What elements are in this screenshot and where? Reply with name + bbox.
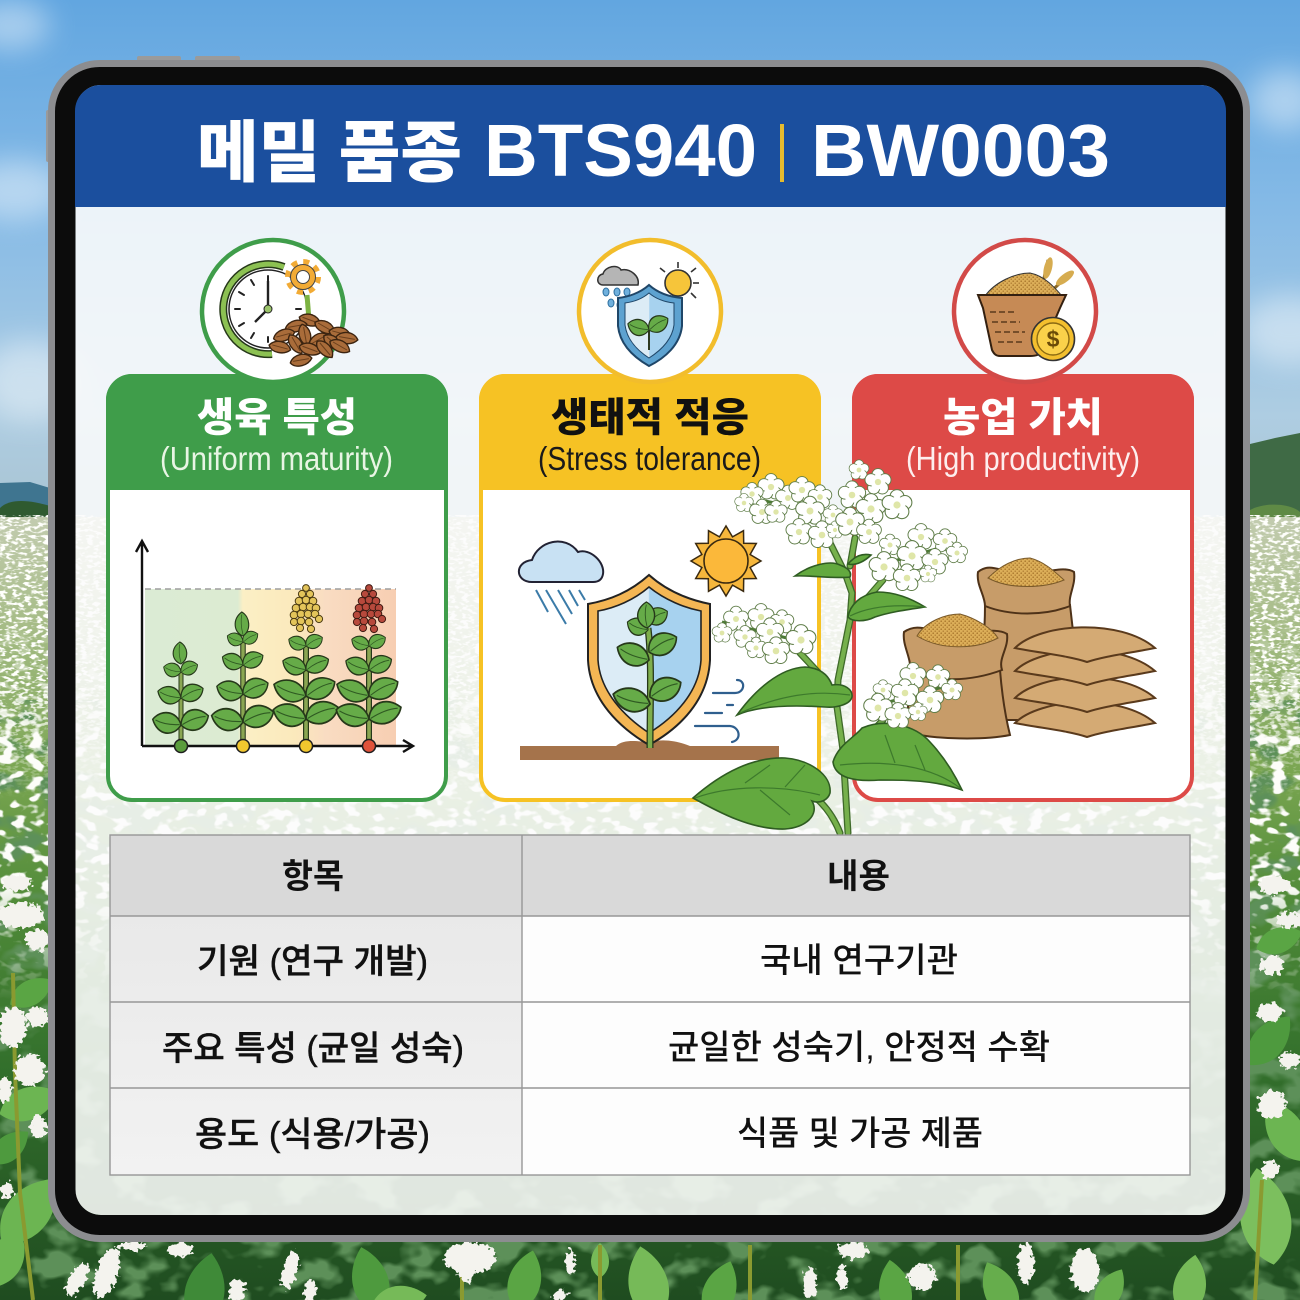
- leaves: [693, 554, 962, 829]
- plant stage 4: [333, 585, 404, 746]
- chart: growth stages: [136, 541, 413, 752]
- title: BTS940: [484, 109, 757, 192]
- stage markers: [174, 740, 376, 752]
- panel: growth characteristics: [106, 240, 448, 800]
- row: main traits: 균일한 성숙기, 안정적 수확: [668, 1029, 1050, 1067]
- icon: weather shield: [579, 240, 721, 382]
- hills: [0, 433, 1300, 522]
- title: [197, 109, 1110, 192]
- side buttons: [46, 56, 240, 162]
- row: main traits: [162, 1029, 1050, 1068]
- stems: [800, 538, 883, 833]
- stems: [13, 973, 1262, 1300]
- row: origin: 기원 (연구 개발): [197, 943, 428, 981]
- table header text: 항목: [282, 858, 344, 896]
- heading: 농업 가치: [943, 396, 1103, 440]
- title: 메밀 품종: [197, 116, 462, 191]
- illustration: sacks of grain: [904, 558, 1155, 738]
- black bezel: [65, 74, 1236, 1226]
- front sack: [904, 614, 1010, 738]
- heading: 생태적 적응: [551, 396, 749, 440]
- illustration: rain cloud: [519, 542, 603, 624]
- row: uses: [195, 1115, 983, 1154]
- row: uses: 용도 (식용/가공): [195, 1116, 430, 1154]
- icon: grain basket with coin: [954, 240, 1096, 382]
- row: uses: 식품 및 가공 제품: [737, 1115, 983, 1153]
- card frame: [108, 376, 446, 800]
- row: main traits: 주요 특성 (균일 성숙): [162, 1030, 464, 1068]
- illustration: sun: [691, 526, 761, 596]
- subheading: (High productivity): [906, 440, 1140, 477]
- plant stage 2: [209, 612, 276, 746]
- flower cluster: top left: [735, 474, 800, 523]
- row: origin: 국내 연구기관: [760, 942, 958, 980]
- flower cluster: top right: [836, 460, 912, 543]
- table header text: 내용: [827, 858, 890, 896]
- card header: [479, 374, 821, 490]
- flower cluster: right: [869, 524, 968, 591]
- title: BW0003: [811, 109, 1110, 192]
- title divider: [780, 124, 784, 182]
- panel: ecological adaptation: [479, 240, 821, 800]
- table: variety summary: [110, 835, 1190, 1175]
- card frame: [481, 376, 819, 800]
- illustration: shield with plant: [588, 575, 710, 748]
- table header text: [282, 858, 890, 896]
- stacked sacks: [1015, 627, 1155, 737]
- panel: agricultural value: [852, 240, 1194, 800]
- sky: [0, 0, 1300, 520]
- white flower clumps: [0, 875, 1300, 1300]
- illustration: ground: [520, 740, 779, 760]
- field: [0, 515, 1300, 1300]
- header bar: [75, 85, 1226, 207]
- plant stage 3: [270, 585, 341, 746]
- back sack: [975, 558, 1078, 720]
- foreground leaves: [0, 920, 1300, 1300]
- table cells: [110, 835, 1190, 1175]
- heading: 생육 특성: [197, 396, 357, 440]
- illustration: wind: [695, 680, 743, 742]
- plant stage 1: [150, 642, 211, 746]
- illustration: buckwheat plant: [693, 460, 968, 833]
- row: origin: [197, 942, 958, 981]
- flower cluster: by the sacks: [864, 663, 963, 728]
- screen background: [75, 85, 1226, 1215]
- subheading: (Stress tolerance): [538, 440, 761, 477]
- subheading: (Uniform maturity): [160, 440, 393, 477]
- clouds: [0, 0, 1300, 420]
- icon: grain basket with coin: $: [1047, 326, 1060, 352]
- flower cluster: left lower: [712, 604, 816, 664]
- card frame: [854, 376, 1192, 800]
- card header: [852, 374, 1194, 490]
- icon: clock with gear and seeds: [202, 240, 359, 382]
- card header: [106, 374, 448, 490]
- flower cluster: top centre: [786, 477, 844, 548]
